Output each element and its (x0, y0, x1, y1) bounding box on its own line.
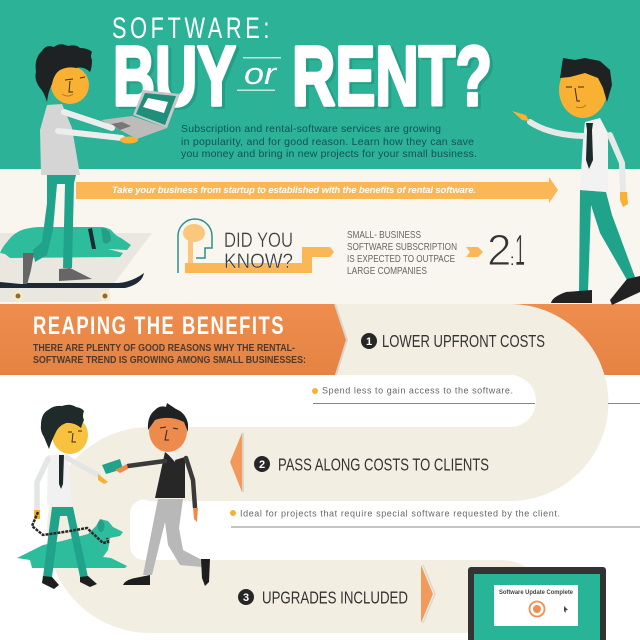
winding path background (47, 304, 640, 633)
fact text: SMALL- BUSINESS (347, 229, 421, 241)
arms (58, 112, 122, 138)
hair (148, 403, 188, 432)
shoes (123, 559, 210, 586)
shirt (580, 118, 608, 192)
fact text (347, 229, 457, 277)
arms (128, 458, 195, 507)
leash (32, 512, 108, 543)
hands (512, 111, 628, 207)
benefits heading: REAPING THE BENEFITS (33, 312, 285, 340)
face (52, 416, 88, 454)
icon: floor shadow (0, 233, 152, 302)
intro text: in popularity, and for good reason. Learn how they can save (181, 136, 474, 148)
fact text: IS EXPECTED TO OUTPACE (347, 253, 455, 265)
panel: orange benefits banner (0, 304, 640, 375)
man in tie (512, 58, 640, 305)
sweater (155, 452, 185, 498)
fact text: LARGE COMPANIES (347, 265, 427, 277)
man with money (102, 403, 210, 586)
benefit 2: 2 (259, 459, 265, 471)
money (102, 459, 123, 474)
ratio: : (510, 252, 514, 269)
laptop (101, 90, 180, 139)
legs (43, 507, 88, 577)
legs (33, 175, 76, 268)
benefit 1: Spend less to gain access to the software. (322, 386, 513, 396)
shoes (23, 253, 92, 285)
hair (560, 58, 612, 102)
hands (34, 474, 108, 519)
text: 1 (515, 226, 525, 275)
ratio (487, 226, 525, 275)
shoes (42, 576, 97, 589)
benefits heading (33, 312, 306, 366)
title: RENT? (292, 29, 492, 123)
arms (37, 458, 98, 510)
tie (586, 123, 593, 169)
intro text (181, 123, 477, 160)
benefit 3: UPGRADES INCLUDED (262, 588, 408, 608)
skateboarder (0, 44, 180, 301)
intro text: Subscription and rental-software services are growing (181, 123, 441, 135)
benefit 1 (312, 304, 640, 404)
man with dog (32, 405, 108, 589)
intro text: you money and bring in new projects for your small business. (181, 148, 477, 160)
benefits heading: THERE ARE PLENTY OF GOOD REASONS WHY THE RENTAL- (33, 343, 295, 354)
benefit 1: 1 (366, 336, 372, 348)
title: or (244, 56, 278, 91)
laptop update screen (468, 567, 606, 640)
arrow banner (76, 177, 558, 203)
ribbon (185, 247, 334, 273)
face (51, 66, 89, 104)
title: BUY (113, 29, 236, 123)
heading (224, 229, 293, 273)
icon: brain head (178, 219, 212, 273)
panel: teal header (0, 0, 640, 169)
arrow banner: Take your business from startup to established with the benefits of rental software. (112, 185, 476, 196)
face (559, 62, 607, 118)
benefit 2: Ideal for projects that require special software requested by the client. (240, 508, 560, 518)
dog on leash (17, 519, 127, 568)
face (149, 410, 187, 452)
title (112, 12, 492, 123)
panel: cream band (0, 169, 640, 304)
shirt (47, 454, 72, 505)
skateboard (0, 273, 144, 302)
trousers (143, 499, 202, 575)
heading: DID YOU (224, 229, 293, 252)
icon: cursor (564, 606, 568, 613)
benefit 2: PASS ALONG COSTS TO CLIENTS (278, 454, 489, 474)
ratio: 2 (487, 226, 511, 275)
benefit 3 (238, 565, 435, 623)
icon: sleeping dog (0, 227, 131, 258)
heading: KNOW? (224, 250, 293, 273)
collar (166, 450, 176, 462)
benefit 2 (230, 433, 640, 528)
chevron (466, 247, 483, 257)
hair (36, 44, 92, 102)
hoodie (40, 104, 80, 175)
tie (59, 455, 64, 489)
benefit 3: 3 (243, 592, 249, 604)
shoes (551, 276, 640, 305)
hand (120, 136, 138, 144)
benefit 1: LOWER UPFRONT COSTS (382, 331, 545, 351)
fact text: SOFTWARE SUBSCRIPTION (347, 241, 457, 253)
title: SOFTWARE: (112, 12, 273, 45)
laptop update screen: Software Update Complete (499, 589, 574, 596)
icon: update spinner (530, 602, 544, 616)
benefits heading: SOFTWARE TREND IS GROWING AMONG SMALL BUSINESSES: (33, 355, 306, 366)
arms (530, 122, 623, 190)
did you know block (178, 219, 525, 277)
hands (115, 464, 198, 522)
legs (579, 190, 635, 292)
hair (41, 405, 84, 449)
